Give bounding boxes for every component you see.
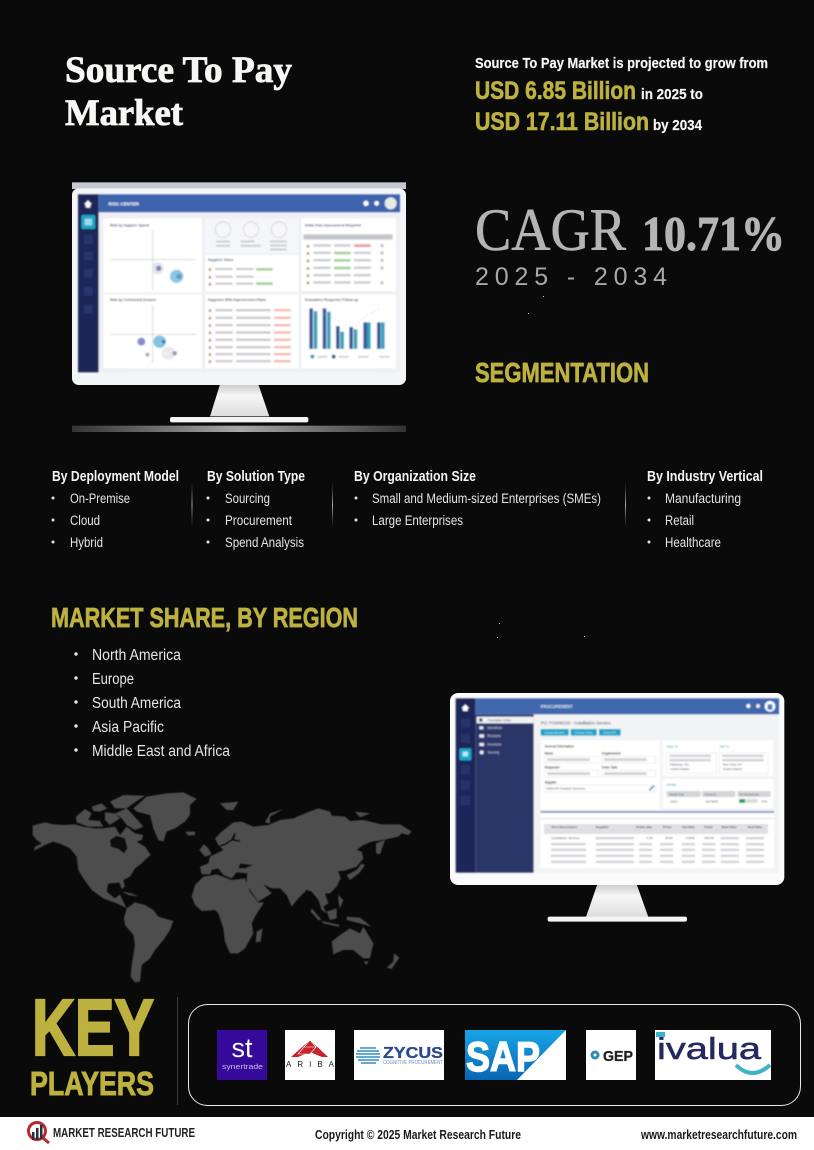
- procurement screen: Name: [545, 752, 553, 756]
- segment column: by solution type: [206, 468, 305, 550]
- region list: [74, 647, 230, 760]
- footer logo: [28, 1122, 195, 1143]
- monitor: risk center dashboard: [72, 182, 406, 432]
- logo: zycus: COGNITIVE PROCUREMENT: [383, 1060, 443, 1066]
- key players heading: [30, 983, 154, 1102]
- logo: synertrade: synertrade: [222, 1064, 263, 1071]
- procurement screen: 85.00: [665, 836, 673, 840]
- procurement screen: Total: [704, 825, 713, 829]
- procurement screen: Requester: [545, 766, 561, 770]
- procurement screen: Ship To: [667, 745, 678, 749]
- procurement screen: Change Order: [575, 731, 593, 735]
- market size forecast text: in 2025 to: [641, 86, 703, 103]
- region list: South America: [92, 695, 181, 712]
- region list: Europe: [92, 671, 134, 688]
- procurement screen: Purchase Order: [487, 718, 512, 722]
- procurement screen: Fiscal Year: [669, 792, 684, 796]
- segmentation heading: SEGMENTATION: [475, 357, 649, 388]
- region list: Middle East and Africa: [92, 743, 230, 760]
- footer bar: [0, 1117, 814, 1150]
- monitor: procurement screen: [450, 693, 784, 922]
- procurement screen: 2022: [670, 799, 678, 803]
- dashboard screen: Initial Risk Assessment Required: [305, 223, 361, 227]
- market size forecast text: USD 17.11 Billion: [475, 108, 649, 136]
- segment column: by deployment model: Cloud: [70, 513, 100, 528]
- market size forecast text: USD 6.85 Billion: [475, 77, 636, 105]
- logo: ivalua: ivalua: [657, 1031, 762, 1066]
- dashboard screen: Risk by Contracted Amount: [110, 298, 157, 302]
- segment column: by deployment model: [52, 468, 179, 550]
- stray dots: [497, 296, 585, 638]
- procurement screen: Order Date: [602, 766, 618, 770]
- footer logo: MARKET RESEARCH FUTURE: [53, 1126, 195, 1140]
- monitor stand: [548, 884, 687, 922]
- monitor body: [72, 188, 406, 385]
- logo: synertrade: [217, 1030, 267, 1080]
- procurement screen: Item Description: [551, 825, 578, 829]
- copyright: Copyright © 2025 Market Research Future: [315, 1127, 521, 1142]
- procurement screen: ITEMS: [545, 813, 555, 817]
- procurement screen: Supplier: [545, 780, 557, 784]
- title: Market: [65, 93, 184, 134]
- procurement screen: Supplier: [596, 825, 610, 829]
- CAGR figure: 2025 - 2034: [475, 263, 667, 291]
- market size forecast text: Source To Pay Market is projected to grow from: [475, 55, 768, 72]
- logo: gep: GEP: [603, 1048, 633, 1065]
- procurement screen: Tax Rate: [682, 825, 695, 829]
- key players heading: KEY: [32, 983, 154, 1072]
- procurement screen: United States: [723, 767, 743, 771]
- segment column: by solution type: By Solution Type: [207, 468, 305, 485]
- logo: ariba: [285, 1030, 335, 1080]
- procurement screen: Price: [663, 825, 672, 829]
- procurement screen: Order Qty: [636, 825, 652, 829]
- market share heading: MARKET SHARE, BY REGION: [51, 602, 358, 633]
- map: americas and greenland: [33, 792, 197, 982]
- procurement screen: Create Receipt: [545, 731, 565, 735]
- CAGR figure: 10.71%: [642, 206, 785, 261]
- procurement screen: 100.00: [704, 836, 714, 840]
- region list: North America: [92, 647, 181, 664]
- procurement screen: Workflow: [487, 726, 503, 730]
- CAGR figure: CAGR: [475, 197, 626, 263]
- monitor stand: [170, 384, 308, 422]
- procurement screen: United States: [670, 767, 690, 771]
- dashboard screen: [78, 194, 400, 372]
- procurement screen: Invoices: [487, 743, 502, 747]
- procurement screen: % Consumed: [739, 792, 759, 796]
- procurement screen: Bill To: [720, 745, 730, 749]
- monitor body: [450, 693, 784, 885]
- segment column: by deployment model: On-Premise: [70, 491, 130, 506]
- logo: synertrade: st: [231, 1033, 253, 1063]
- title: [65, 50, 293, 134]
- procurement screen: Sourcing: [487, 750, 499, 754]
- segment column: by deployment model: Hybrid: [70, 535, 103, 550]
- segment column: by deployment model: By Deployment Model: [52, 468, 179, 485]
- procurement screen: Amount: [705, 792, 716, 796]
- segment column: by solution type: Spend Analysis: [225, 535, 304, 550]
- region list: Asia Pacific: [92, 719, 164, 736]
- procurement screen: Cancel PO: [603, 731, 617, 735]
- key players panel: [188, 1004, 800, 1106]
- market size forecast text: [475, 55, 768, 136]
- procurement screen: 0.00%: [686, 836, 695, 840]
- procurement screen: Palestine, CA: [670, 763, 689, 767]
- segment column: by industry vertical: By Industry Vertical: [647, 468, 763, 485]
- segment column: by industry vertical: Retail: [665, 513, 694, 528]
- segment column: by industry vertical: [647, 468, 763, 550]
- procurement screen: 100.5000: [705, 799, 718, 803]
- segment column: by organization size: Small and Medium-sized Enterprises (SMEs): [372, 491, 601, 506]
- segment column: by organization size: By Organization Size: [354, 468, 476, 485]
- logo: ariba: ARIBA: [286, 1060, 335, 1069]
- logo: sap: SAP: [466, 1033, 540, 1080]
- logo: ivalua: [655, 1030, 771, 1080]
- title: Source To Pay: [65, 50, 293, 91]
- evaluation bar chart: [309, 308, 389, 359]
- procurement screen: General Information: [545, 745, 574, 749]
- key players heading: PLAYERS: [30, 1065, 154, 1102]
- segment column: by organization size: [354, 468, 601, 528]
- CAGR figure: [475, 197, 785, 291]
- logo: zycus: ZYCUS: [383, 1045, 443, 1062]
- procurement screen: End Date: [748, 825, 762, 829]
- procurement screen: New York, NY: [723, 763, 742, 767]
- procurement screen: PO: PO005326 - Installation Service: [541, 721, 611, 726]
- procurement screen: EMCOR Facilities Services: [547, 786, 586, 790]
- dashboard screen: Risk by Supplier Spend: [110, 223, 149, 227]
- procurement screen: Installation Service: [551, 836, 580, 840]
- procurement screen: Receipts: [487, 734, 501, 738]
- dashboard screen: Evaluation Response Follow up: [305, 298, 359, 302]
- procurement screen: Start Date: [721, 825, 737, 829]
- procurement screen: Organization: [602, 752, 621, 756]
- segment column: by organization size: Large Enterprises: [372, 513, 463, 528]
- world map: [33, 792, 412, 982]
- segment column: by industry vertical: Manufacturing: [665, 491, 741, 506]
- procurement screen: [456, 698, 779, 873]
- logo: gep: [586, 1030, 636, 1080]
- map: europe, africa, asia and oceania: [192, 802, 412, 969]
- procurement screen: 1.00: [646, 836, 653, 840]
- segment column: by solution type: Procurement: [225, 513, 292, 528]
- segment column: by industry vertical: Healthcare: [665, 535, 721, 550]
- dashboard screen: Suppliers With Improvement Plans: [208, 298, 266, 302]
- dashboard screen: Supplier Items: [208, 258, 233, 262]
- procurement screen: PROCUREMENT: [541, 704, 573, 709]
- segment column: by solution type: Sourcing: [225, 491, 270, 506]
- procurement screen: 37%: [761, 799, 768, 803]
- market size forecast text: by 2034: [653, 117, 703, 134]
- dashboard screen: RISK CENTER: [108, 201, 140, 206]
- logo: zycus: [354, 1030, 444, 1080]
- procurement screen: Budget: [667, 782, 677, 786]
